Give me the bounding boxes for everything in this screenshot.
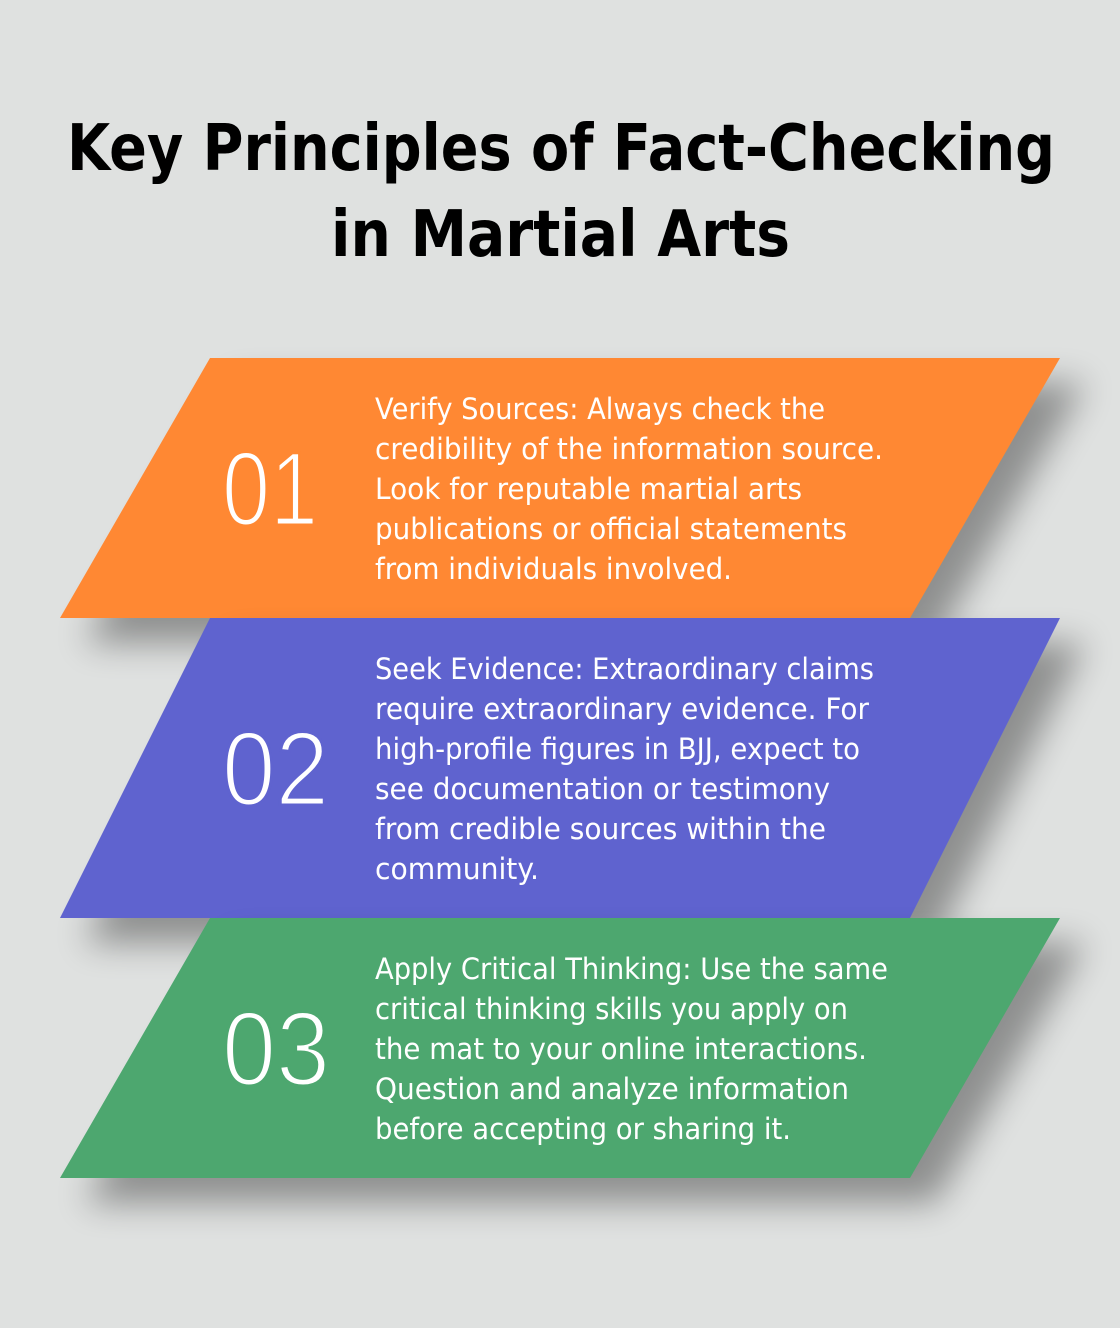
text: verify sources (375, 392, 883, 586)
number 03: 03 (222, 991, 330, 1108)
text: verify sources: credibility of the information source. (375, 432, 883, 466)
text: seek evidence: require extraordinary evidence. For (375, 692, 869, 726)
text: apply critical thinking (375, 952, 888, 1146)
text: apply critical thinking: critical thinking skills you apply on (375, 992, 848, 1026)
title: in Martial Arts (331, 198, 790, 272)
text: seek evidence: see documentation or testimony (375, 772, 830, 806)
text: seek evidence: high-profile figures in BJJ, expect to (375, 732, 860, 766)
text: verify sources: publications or official statements (375, 512, 847, 546)
number 01: 01 (222, 431, 318, 548)
text: apply critical thinking: the mat to your online interactions. (375, 1032, 867, 1066)
text: apply critical thinking: Question and analyze information (375, 1072, 849, 1106)
text: apply critical thinking: Apply Critical Thinking: Use the same (375, 952, 888, 986)
text: seek evidence (375, 652, 874, 886)
panel: verify sources (60, 358, 1085, 643)
number 02: 02 (222, 711, 329, 828)
text: verify sources: from individuals involved. (375, 552, 732, 586)
text: seek evidence: community. (375, 852, 539, 886)
panel: apply critical thinking (60, 918, 1085, 1203)
text: verify sources: Verify Sources: Always check the (375, 392, 825, 426)
text: seek evidence: from credible sources within the (375, 812, 826, 846)
title (67, 112, 1055, 272)
text: apply critical thinking: before accepting or sharing it. (375, 1112, 791, 1146)
panel: seek evidence (60, 618, 1085, 943)
text: verify sources: Look for reputable martial arts (375, 472, 802, 506)
text: seek evidence: Seek Evidence: Extraordinary claims (375, 652, 874, 686)
